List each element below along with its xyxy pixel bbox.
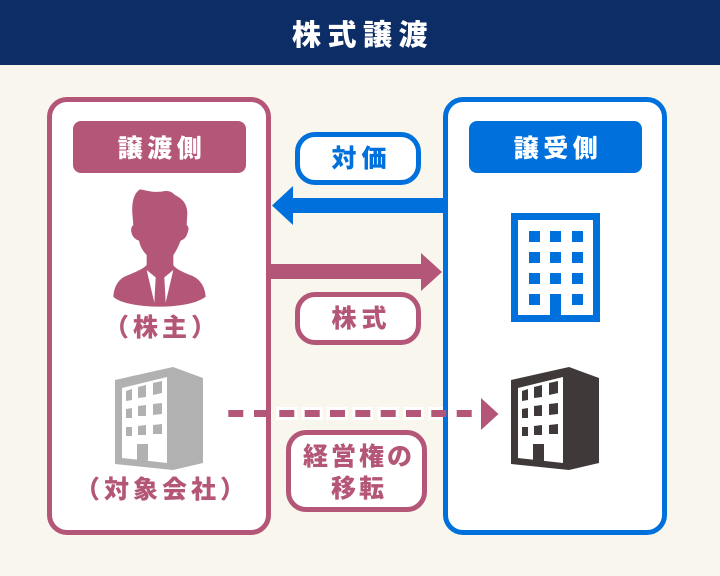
label: consideration — [295, 132, 421, 185]
label: transfer of management rights: 移転 — [331, 474, 387, 502]
title banner — [0, 0, 720, 65]
icon: shareholder person — [113, 189, 206, 307]
title banner: 株式譲渡 — [292, 20, 434, 52]
icon: acquirer building (blue) — [511, 213, 600, 322]
caption: shareholder: （株主） — [104, 314, 220, 342]
panel: transferor side — [47, 97, 271, 535]
heading: transferee: 譲受側 — [514, 134, 602, 162]
panel: transferee side — [443, 97, 667, 535]
label: shares — [295, 292, 421, 345]
arrow: management rights transfer (dashed) — [228, 398, 498, 430]
label: transfer of management rights — [286, 430, 427, 512]
heading: transferor: 譲渡側 — [118, 134, 206, 162]
label: consideration: 対価 — [331, 145, 392, 173]
heading: transferee — [469, 121, 642, 173]
icon: target company building after transfer (dark) — [511, 367, 599, 470]
arrow: shares transferred — [271, 253, 442, 291]
label: transfer of management rights: 経営権の — [303, 442, 415, 470]
icon: target company building (grey) — [115, 367, 203, 470]
arrow: consideration paid to transferor — [272, 186, 443, 225]
label: shares: 株式 — [331, 305, 392, 333]
caption: target company: （対象会社） — [75, 476, 249, 504]
heading: transferor — [73, 121, 246, 173]
